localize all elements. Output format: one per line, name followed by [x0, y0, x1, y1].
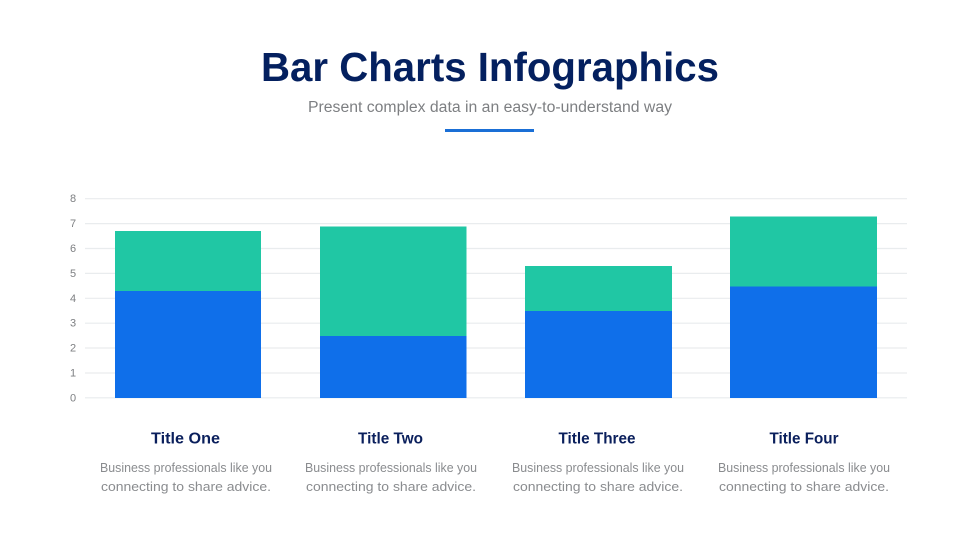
column text: Title One: Title One — [151, 430, 220, 448]
y axis labels: 0 — [70, 392, 76, 404]
y axis labels: 7 — [70, 218, 76, 230]
bar: Title One — [115, 231, 261, 398]
column text: Title Two: Title Two — [358, 430, 423, 448]
column text: Title One: Business professionals like you — [100, 461, 272, 475]
subtitle: Present complex data in an easy-to-understand way — [308, 99, 672, 116]
bar: Title Three — [525, 266, 672, 398]
y axis labels: 5 — [70, 268, 76, 280]
y axis labels: 3 — [70, 318, 76, 330]
column text: Title Three — [512, 430, 684, 494]
y axis labels: 2 — [70, 342, 76, 354]
column text: Title One — [100, 430, 272, 494]
column text: Title Three: Business professionals like you — [512, 461, 684, 475]
column text: Title Two — [305, 430, 477, 494]
column text: Title Two: connecting to share advice. — [306, 480, 476, 494]
column text: Title Three: connecting to share advice. — [513, 480, 683, 494]
y axis labels: 8 — [70, 193, 76, 205]
title: Bar Charts Infographics — [261, 44, 719, 90]
bar: Title Two — [320, 226, 466, 398]
y axis labels — [70, 193, 76, 404]
column text: Title Two: Business professionals like you — [305, 461, 477, 475]
column text: Title Four — [718, 430, 890, 494]
column text: Title One: connecting to share advice. — [101, 480, 271, 494]
title underline accent — [445, 129, 534, 132]
y axis labels: 4 — [70, 293, 76, 305]
y axis labels: 6 — [70, 243, 76, 255]
y axis labels: 1 — [70, 368, 76, 380]
column text: Title Four: Business professionals like you — [718, 461, 890, 475]
bar chart — [70, 193, 907, 404]
column text: Title Four: connecting to share advice. — [719, 480, 889, 494]
column text: Title Three: Title Three — [558, 430, 636, 448]
bar: Title Four — [730, 216, 877, 398]
column text: Title Four: Title Four — [770, 430, 838, 448]
